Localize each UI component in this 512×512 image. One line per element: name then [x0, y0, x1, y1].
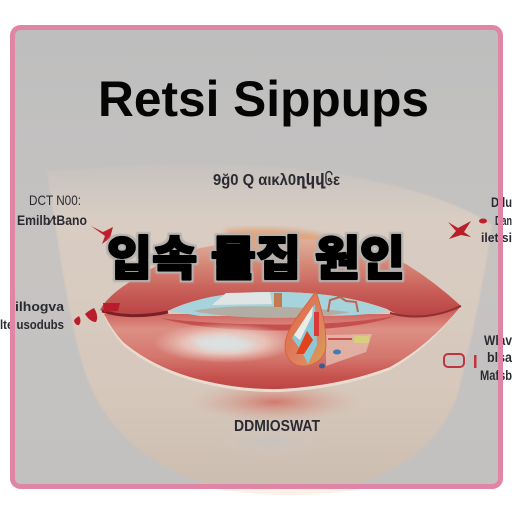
upper lip glow — [223, 226, 326, 249]
lip parting line right — [390, 306, 461, 317]
face skin — [47, 165, 492, 492]
chin overflow below the frame — [210, 488, 370, 495]
drop body — [285, 291, 326, 366]
chin caption: DDMIOSWAT — [234, 418, 320, 435]
upper lip — [100, 240, 461, 317]
upper left text line 1: DCT N00: — [29, 192, 81, 208]
callout: lower left — [0, 299, 97, 332]
lower lip pale rim — [104, 306, 461, 392]
highlight sparkle — [190, 335, 258, 352]
lower left text line 1: ilhogva — [15, 299, 65, 314]
detail blue dot — [333, 350, 341, 354]
teeth and mouth opening — [170, 292, 387, 316]
lower inner lip band — [160, 316, 395, 331]
icon: red dot — [479, 218, 487, 224]
drop white facet — [294, 306, 313, 340]
icon: upper left red arrow — [91, 226, 113, 244]
lip parting line left — [102, 311, 168, 316]
icon: red drops — [74, 308, 97, 325]
tooth gap accent — [274, 293, 282, 307]
drop red bar — [314, 312, 319, 336]
lower left text line 2: lte usodubs — [0, 317, 64, 332]
detail stripe — [328, 338, 352, 340]
tooth white facet — [212, 292, 272, 305]
teeth grey band — [193, 306, 350, 318]
title: Retsi Sippups — [98, 71, 429, 127]
lower lip detail box — [326, 334, 372, 366]
icon: red cross mark — [448, 221, 471, 239]
left lip corner red — [103, 303, 120, 312]
callout: upper right — [448, 194, 512, 245]
chin highlight — [263, 440, 278, 444]
detail yellow — [354, 336, 369, 343]
heading: Korean title: 입속 물집 원인 — [107, 232, 405, 285]
icon: red capsule — [444, 354, 464, 367]
drop reflection — [292, 304, 317, 364]
chin shadow — [206, 389, 344, 418]
icon: blister drop — [285, 291, 326, 366]
illustration: face and lips — [47, 165, 492, 492]
lower lip highlight — [158, 324, 286, 362]
upper left text line 2: Emilb⁄tBano — [17, 212, 87, 228]
icon: red marker — [474, 355, 476, 368]
subtitle label: 9ğ0 Q αικλ0ղկվ၆ε — [213, 170, 340, 189]
callout: lower right — [444, 332, 512, 383]
drop red arrow — [296, 331, 313, 354]
small mark on teeth — [328, 297, 358, 312]
blue dot under drop — [319, 364, 325, 368]
callout: upper left — [17, 192, 113, 244]
lower lip — [104, 306, 461, 389]
